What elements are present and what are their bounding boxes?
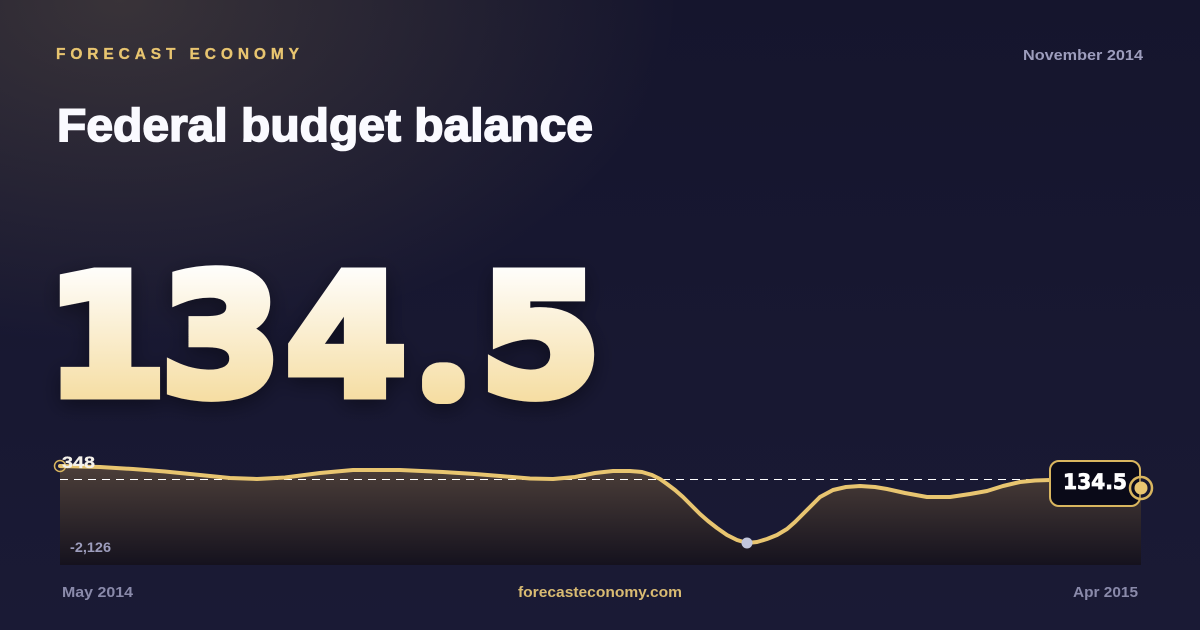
- min label: -2,126: [70, 540, 112, 555]
- end value callout: [1050, 461, 1140, 506]
- sparkline chart: [54, 453, 1152, 565]
- brand label: FORECAST ECONOMY: [56, 46, 300, 63]
- big number: 5: [480, 240, 601, 433]
- min marker: [742, 538, 752, 548]
- axis start label: May 2014: [62, 584, 134, 601]
- reference dashed line: [60, 478, 1141, 480]
- end marker: [1130, 477, 1152, 499]
- big number: .: [436, 350, 451, 397]
- max label: 348: [62, 453, 95, 472]
- title: Federal budget balance: [57, 99, 593, 151]
- big number: 134: [46, 240, 406, 433]
- area fill: [60, 466, 1141, 565]
- date: November 2014: [1023, 47, 1144, 64]
- start marker: [54, 460, 66, 472]
- axis end label: Apr 2015: [1073, 584, 1138, 601]
- line series: [60, 466, 1050, 543]
- end value callout: 134.5: [1063, 470, 1127, 494]
- source: forecasteconomy.com: [518, 584, 682, 601]
